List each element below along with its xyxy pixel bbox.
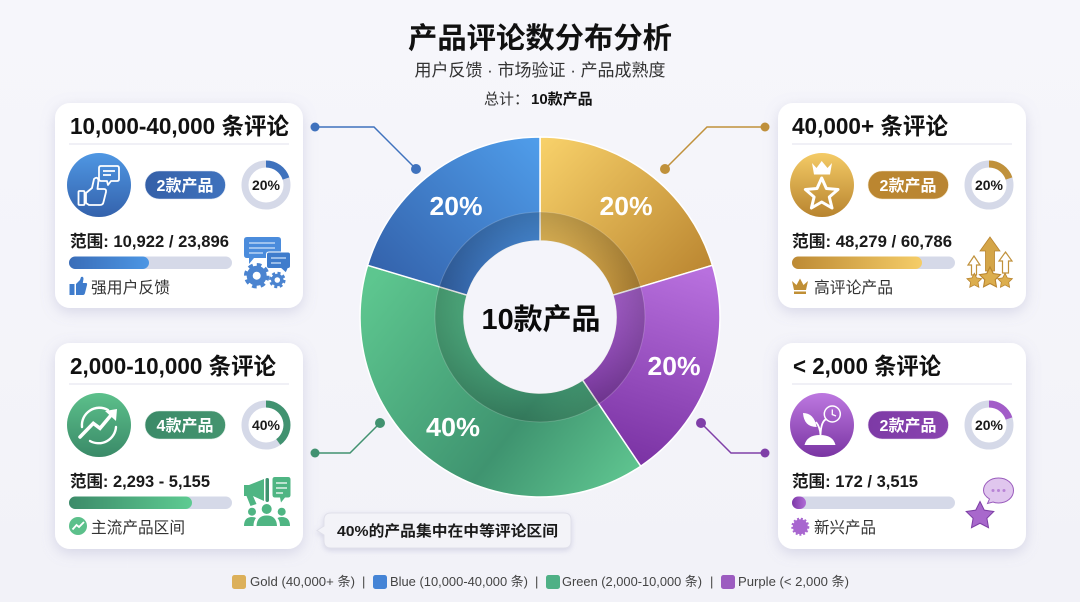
badge: product count [868,411,948,439]
legend: | [362,574,365,589]
icon: speech bubble and star [966,478,1014,528]
ring: 20 percent: 20% [252,177,281,193]
label: green percent: 40% [426,412,480,442]
segment: purple 20% [582,265,720,466]
progress bar [792,256,955,269]
title: 产品评论数分布分析 [408,22,672,55]
legend: | [535,574,538,589]
legend: blue: Blue (10,000-40,000 条) [390,574,528,589]
connector: gold [660,122,770,174]
label: blue percent: 20% [430,191,482,221]
total count: 总计： [484,91,529,108]
icon: thumbs up with speech bubble [67,153,131,217]
legend: | [710,574,713,589]
connector: green [310,418,385,458]
legend: gold: Gold (40,000+ 条) [250,574,355,589]
tag text: 主流产品区间 [91,519,185,537]
ring: 40 percent: 40% [252,417,281,433]
icon: megaphone and audience [244,477,290,526]
panel: 40,000+ reviews [778,103,1026,308]
ring: 20 percent: 20% [975,177,1004,193]
callout text: 40%的产品集中在中等评论区间 [337,522,558,540]
range text: 范围: 172 / 3,515 [792,472,918,491]
inner shaded ring [435,212,645,422]
callout [317,513,571,548]
segment: green 40% [360,265,641,497]
range text: 范围: 2,293 - 5,155 [70,472,210,491]
icon: small burst [792,519,808,535]
center label: 10款产品 [482,303,600,336]
panel heading: 10,000-40,000 条评论 [70,113,289,139]
tag text: 新兴产品 [814,519,876,537]
legend: purple: Purple (< 2,000 条) [738,574,849,589]
ring: 20 percent [968,164,1010,206]
badge: product count: 2款产品 [880,177,936,195]
icon: crown and star [790,153,854,217]
segment: blue 20% [368,137,540,295]
total count: 10款产品 [531,91,593,108]
donut chart [360,137,720,497]
label: purple percent: 20% [648,351,700,381]
legend [232,574,849,589]
badge: product count: 4款产品 [157,417,213,435]
icon: small trend badge [69,517,87,535]
icon: chat bubbles and gears [244,237,290,287]
panel: 10,000-40,000 reviews [55,103,303,308]
badge: product count [868,171,948,199]
connector: blue [310,122,421,174]
ring: 20 percent: 20% [975,417,1004,433]
ring: 20 percent [245,164,287,206]
panel heading: < 2,000 条评论 [793,353,941,379]
icon: growth arrow [67,393,131,457]
ring: 20 percent [968,404,1010,446]
tag text: 强用户反馈 [91,279,170,297]
center hole [464,241,616,393]
progress bar [69,496,232,509]
badge: product count: 2款产品 [157,177,213,195]
icon: sprout with clock [790,393,854,457]
subtitle: 用户反馈 · 市场验证 · 产品成熟度 [414,60,666,80]
tag text: 高评论产品 [814,279,893,297]
progress bar [69,256,232,269]
badge: product count [145,411,226,439]
panel: under 2,000 reviews [778,343,1026,549]
badge: product count [145,171,226,199]
label: gold percent: 20% [600,191,652,221]
badge: product count: 2款产品 [880,417,936,435]
icon: small thumb [70,277,87,295]
icon: small crown [792,278,808,294]
panel: 2,000-10,000 reviews [55,343,303,549]
icon: arrows and stars [967,237,1012,287]
progress bar [792,496,955,509]
ring: 40 percent [245,404,287,446]
connector: purple [696,418,770,458]
panel heading: 40,000+ 条评论 [792,113,948,139]
panel heading: 2,000-10,000 条评论 [70,353,276,379]
segment: gold 20% [540,137,712,295]
legend: green: Green (2,000-10,000 条) [562,574,702,589]
range text: 范围: 48,279 / 60,786 [792,232,952,251]
range text: 范围: 10,922 / 23,896 [70,232,229,251]
